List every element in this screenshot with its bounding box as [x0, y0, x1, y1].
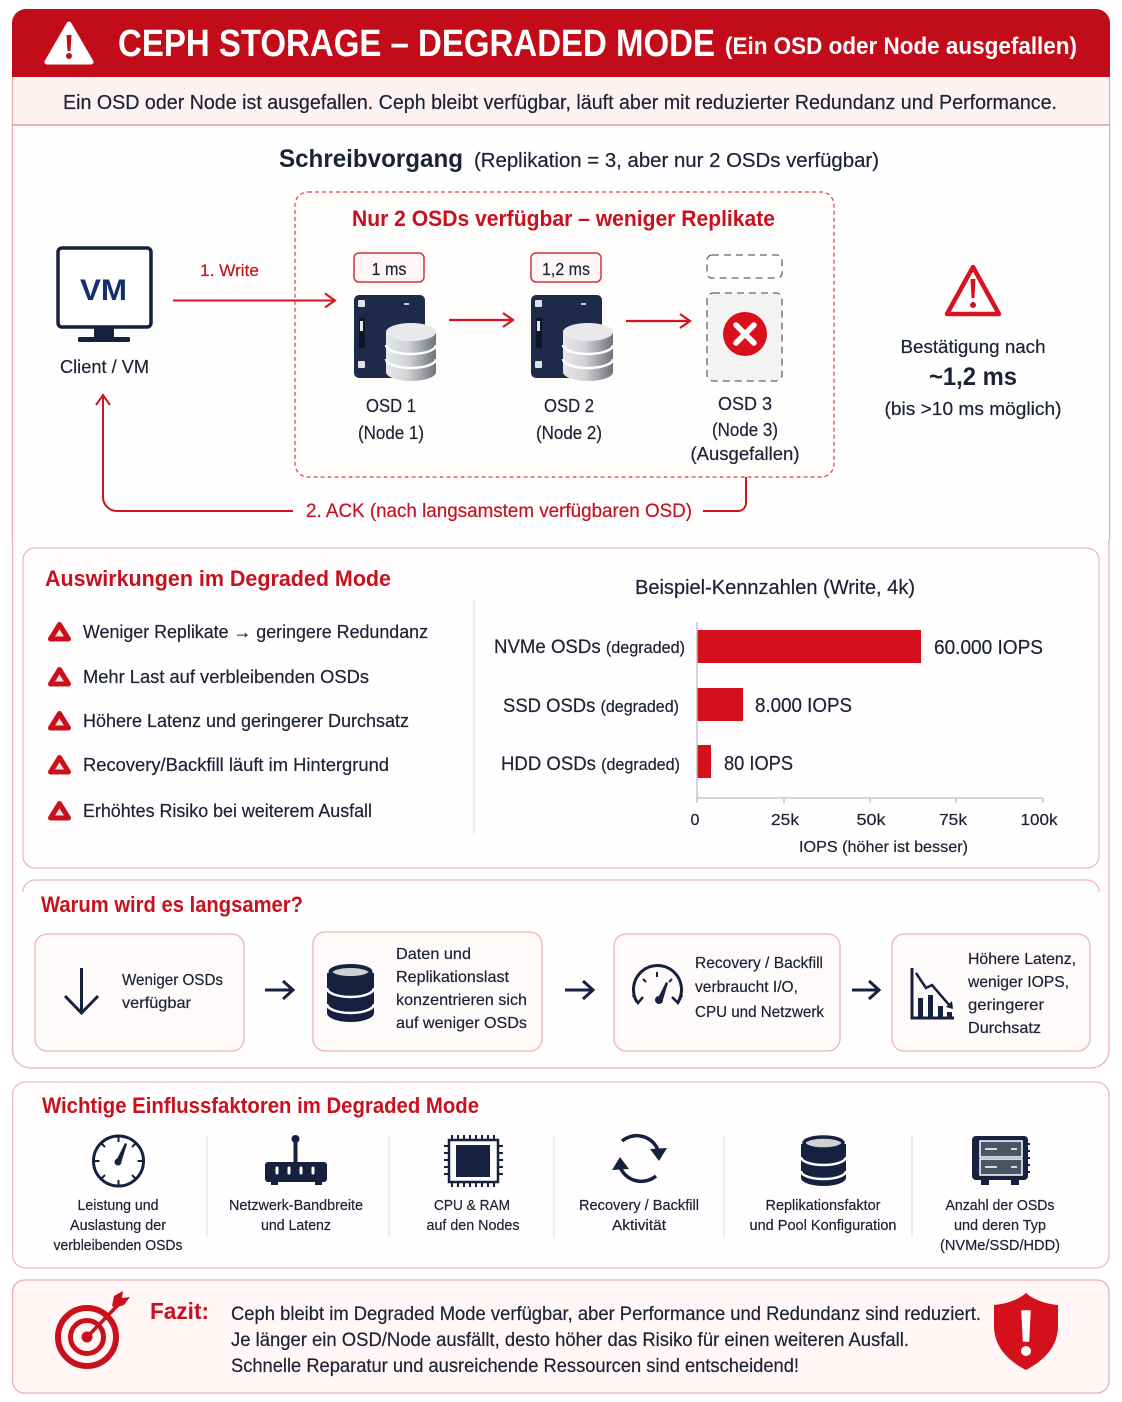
step 2: auf weniger OSDs [396, 1015, 527, 1032]
arrow: OSD 1 to OSD 2 [449, 313, 513, 327]
label OSD 3: (Ausgefallen) [690, 443, 800, 464]
step 4: Höhere Latenz, [968, 951, 1076, 968]
icon: VM monitor [58, 248, 151, 342]
icon: down arrow [65, 968, 98, 1013]
icon: storage enclosure [972, 1136, 1030, 1185]
panel heading: Nur 2 OSDs verfügbar – weniger Replikate [352, 206, 775, 231]
factor 6: (NVMe/SSD/HDD) [940, 1238, 1060, 1254]
label OSD 1: OSD 1 [366, 395, 416, 416]
icon: warning triangle [47, 24, 91, 62]
factor 3: auf den Nodes [426, 1218, 520, 1234]
factor 5: und Pool Konfiguration [750, 1218, 896, 1234]
factor 3: CPU & RAM [434, 1198, 510, 1214]
label OSD 2 [536, 395, 602, 443]
step 1 [35, 934, 244, 1051]
axis: 100k [1020, 812, 1059, 829]
latency badge OSD 2 [531, 253, 601, 282]
factor 6: und deren Typ [954, 1218, 1046, 1234]
panel: available OSDs [295, 192, 834, 477]
icon: target [58, 1291, 130, 1366]
panel: conclusion [12, 1280, 1109, 1393]
axis: IOPS (höher ist besser) [799, 839, 968, 856]
summary band: Ein OSD oder Node ist ausgefallen. Ceph bleibt verfügbar, läuft aber mit reduzierter Redundanz und Performance. [63, 92, 1057, 114]
label OSD 3: OSD 3 [718, 393, 772, 414]
section heading: write [279, 145, 879, 173]
latency badge OSD 2: 1,2 ms [542, 259, 590, 279]
axis: 0 [691, 812, 700, 829]
axis: 25k [771, 812, 800, 829]
acknowledgement callout: ~1,2 ms [929, 363, 1017, 391]
icon: shield [994, 1293, 1058, 1370]
arrow: ACK return [96, 395, 746, 511]
item 4: Recovery/Backfill läuft im Hintergrund [83, 755, 389, 775]
item 5: Erhöhtes Risiko bei weiterem Ausfall [83, 801, 372, 821]
step 3: CPU und Netzwerk [695, 1004, 825, 1021]
icon: database [801, 1137, 846, 1186]
icon: stopwatch gauge [94, 1136, 144, 1186]
SSD row: SSD OSDs (degraded) [503, 696, 679, 717]
factor 2 [229, 1135, 363, 1234]
SSD row [503, 688, 852, 721]
step 4: Durchsatz [968, 1020, 1041, 1037]
arrow: OSD 2 to OSD 3 [626, 314, 690, 328]
label: conclusion: Fazit: [150, 1298, 209, 1324]
heading: Warum wird es langsamer? [41, 892, 303, 917]
step 1: verfügbar [122, 995, 192, 1012]
conclusion text: Ceph bleibt im Degraded Mode verfügbar, aber Performance und Redundanz sind reduziert. [231, 1304, 981, 1325]
conclusion text: Schnelle Reparatur und ausreichende Ressourcen sind entscheidend! [231, 1356, 799, 1377]
icon: database [327, 966, 374, 1022]
arrow 2 [565, 981, 593, 999]
factor 6: Anzahl der OSDs [946, 1198, 1054, 1214]
factor 3 [426, 1135, 520, 1234]
HDD row: HDD OSDs (degraded) [501, 754, 680, 775]
factor 1 [54, 1136, 182, 1254]
step 3 [614, 934, 840, 1051]
acknowledgement callout [884, 267, 1062, 419]
arrow 1 [265, 981, 293, 999]
heading: Wichtige Einflussfaktoren im Degraded Mode [42, 1093, 479, 1118]
NVMe row [494, 630, 1043, 663]
panel: impact [23, 548, 1099, 868]
section heading: write: (Replikation = 3, aber nur 2 OSDs verfügbar) [474, 150, 879, 172]
axis: 50k [856, 812, 887, 829]
conclusion text: Je länger ein OSD/Node ausfällt, desto höher das Risiko für einen weiteren Ausfall. [231, 1330, 909, 1351]
section heading: write: Schreibvorgang [279, 145, 463, 173]
panel: influencing factors [12, 1082, 1109, 1268]
step 4: weniger IOPS, [967, 974, 1069, 991]
icon: network router [265, 1135, 327, 1185]
empty latency badge OSD 3 [707, 255, 782, 278]
conclusion text [231, 1304, 981, 1377]
icon: CPU chip [444, 1135, 503, 1187]
label: ACK: 2. ACK (nach langsamstem verfügbaren OSD) [306, 500, 692, 522]
factor 2: und Latenz [261, 1218, 331, 1234]
label OSD 2: (Node 2) [536, 422, 602, 443]
NVMe row: NVMe OSDs (degraded) [494, 637, 685, 658]
summary band [12, 77, 1110, 125]
factor 6 [940, 1136, 1060, 1254]
acknowledgement callout: (bis >10 ms möglich) [884, 398, 1062, 419]
step 4: geringerer [968, 997, 1045, 1014]
factor 4: Recovery / Backfill [579, 1198, 699, 1214]
HDD row [501, 745, 793, 778]
factor 2: Netzwerk-Bandbreite [229, 1198, 363, 1214]
icon: recovery cycle [612, 1136, 667, 1181]
factor 1: Auslastung der [70, 1218, 166, 1234]
SSD row: 8.000 IOPS [755, 695, 852, 717]
step 3: Recovery / Backfill [695, 955, 823, 972]
step 2: Daten und [396, 946, 471, 963]
factor 5: Replikationsfaktor [766, 1198, 881, 1214]
icon: declining chart [912, 968, 954, 1018]
step 2: konzentrieren sich [396, 992, 527, 1009]
item 3: Höhere Latenz und geringerer Durchsatz [83, 711, 409, 731]
icon: gauge [633, 966, 682, 1004]
factor 1: verbleibenden OSDs [54, 1238, 182, 1254]
latency badge OSD 1 [354, 253, 424, 282]
subtitle: (Ein OSD oder Node ausgefallen) [725, 33, 1077, 60]
heading: Auswirkungen im Degraded Mode [45, 566, 391, 591]
item 1: Weniger Replikate → geringere Redundanz [83, 622, 428, 642]
panel: write flow [12, 9, 1110, 540]
label OSD 3: (Node 3) [712, 419, 778, 440]
step 1: Weniger OSDs [122, 972, 223, 989]
impact list [50, 622, 428, 821]
axis: 75k [939, 812, 968, 829]
side rails of lower frame [12, 540, 1109, 1068]
icon: OSD 2 server [531, 295, 613, 381]
axis [691, 622, 1059, 856]
step 4 [892, 934, 1090, 1051]
icon: warning [947, 267, 999, 314]
icon: VM monitor: VM [80, 274, 127, 307]
step 3: verbraucht I/O, [695, 979, 798, 996]
chart title: Beispiel-Kennzahlen (Write, 4k) [635, 577, 915, 599]
step 2: Replikationslast [396, 969, 510, 986]
panel: why slower [23, 880, 1099, 1051]
title: CEPH STORAGE – DEGRADED MODE [118, 23, 715, 65]
label OSD 1: (Node 1) [358, 422, 424, 443]
factor 1: Leistung und [78, 1198, 158, 1214]
step 2 [313, 932, 542, 1051]
label OSD 3 [690, 393, 800, 464]
factor 4 [579, 1136, 699, 1234]
header banner [12, 9, 1110, 77]
arrow 3 [852, 981, 879, 999]
item 2: Mehr Last auf verbleibenden OSDs [83, 667, 369, 687]
label: write step: 1. Write [200, 261, 259, 280]
factor 5 [750, 1137, 896, 1234]
icon: OSD 1 server [354, 295, 436, 381]
acknowledgement callout: Bestätigung nach [900, 336, 1046, 357]
NVMe row: 60.000 IOPS [934, 637, 1043, 659]
bar chart: IOPS [494, 577, 1059, 856]
label OSD 2: OSD 2 [544, 395, 594, 416]
arrow: write [173, 294, 335, 308]
label: client: Client / VM [60, 357, 149, 377]
factor 4: Aktivität [612, 1218, 666, 1234]
latency badge OSD 1: 1 ms [372, 259, 407, 279]
icon: failed OSD 3 [707, 293, 782, 381]
HDD row: 80 IOPS [724, 753, 793, 775]
label OSD 1 [358, 395, 424, 443]
